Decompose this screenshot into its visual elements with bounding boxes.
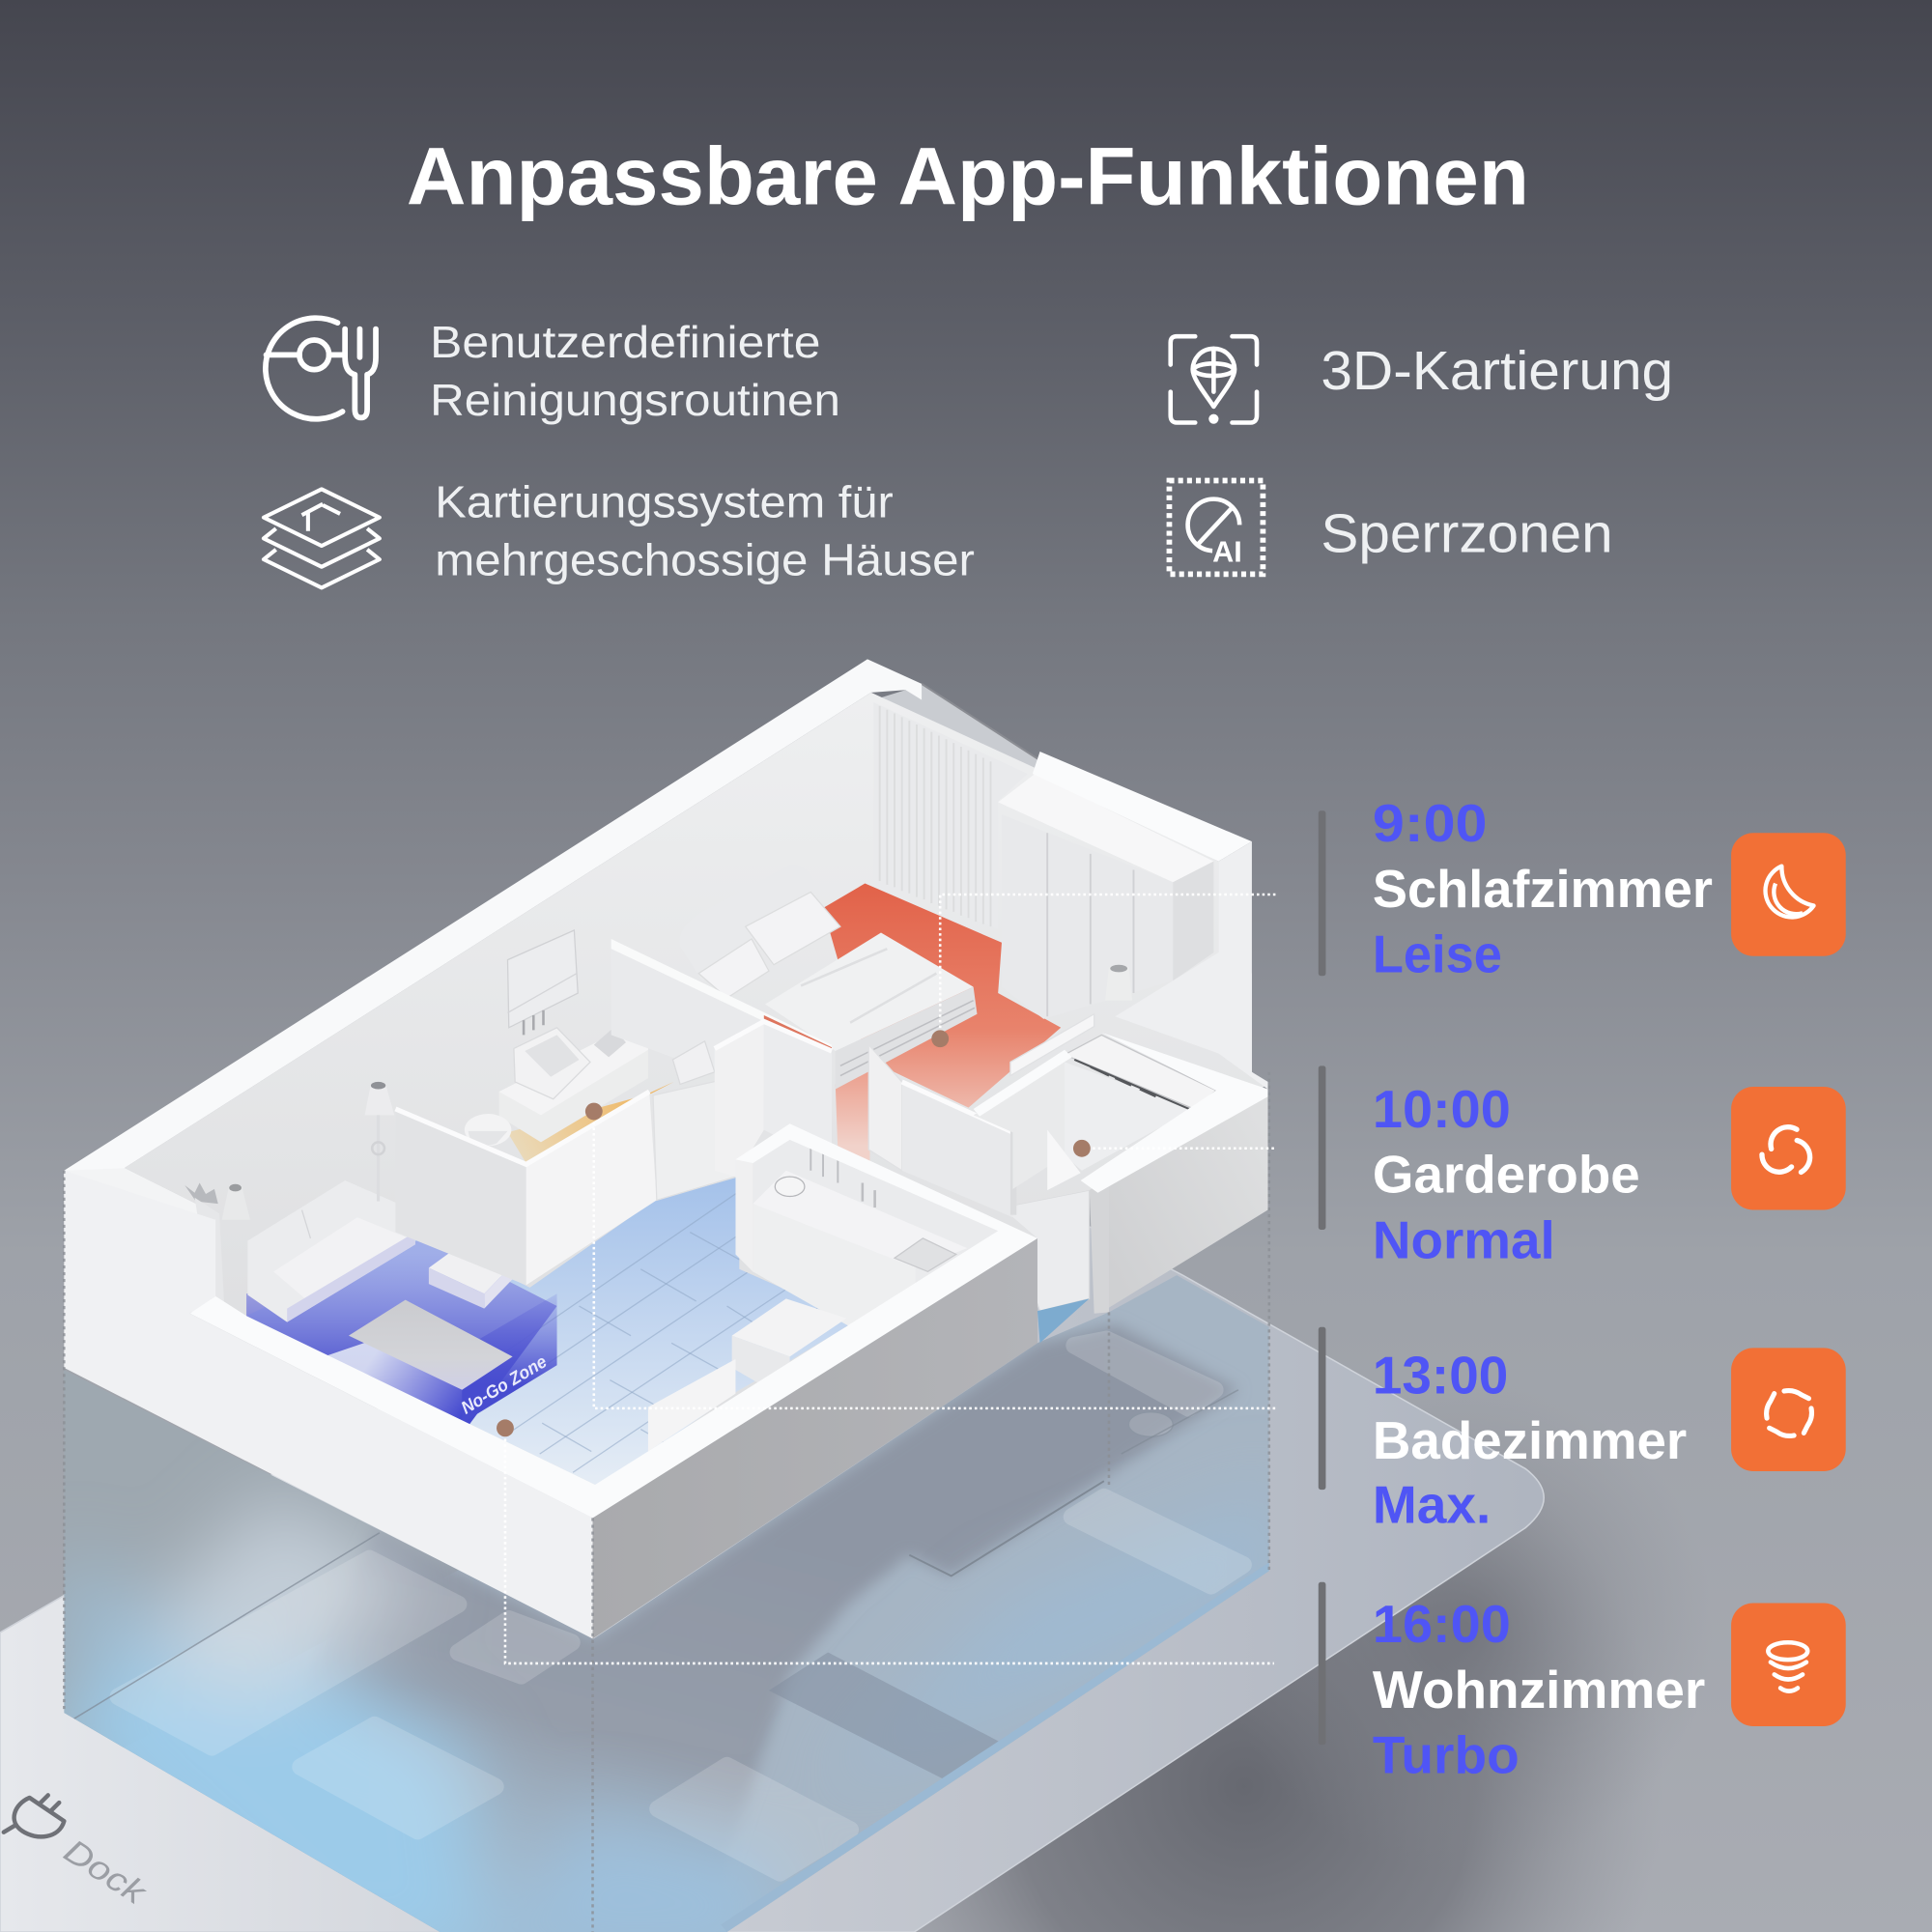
icon: robot and fork bbox=[266, 318, 376, 419]
window glass bbox=[873, 684, 1040, 774]
schedule: living room bbox=[1319, 1582, 1846, 1784]
nightstand bbox=[672, 1041, 715, 1084]
closet interior bbox=[974, 1062, 1065, 1189]
kitchen left wall bbox=[735, 1159, 753, 1271]
floor plate bbox=[0, 1109, 1544, 1932]
bed bbox=[680, 865, 977, 1090]
icon: no-go AI zone bbox=[1169, 480, 1263, 574]
chair bbox=[648, 1359, 735, 1452]
icon: normal mode bbox=[1731, 1087, 1846, 1210]
feature: no-go zones: Sperrzonen bbox=[1321, 502, 1613, 563]
wall: bathroom front bbox=[395, 1109, 526, 1285]
blue floor bbox=[254, 1178, 848, 1485]
schedule: wardrobe: Garderobe bbox=[1373, 1145, 1640, 1205]
no-go zone bbox=[246, 1238, 557, 1424]
feature: custom routines: Benutzerdefinierte bbox=[430, 317, 820, 367]
feature: multi-floor mapping: Kartierungssystem für bbox=[435, 477, 894, 527]
closet outer wall bbox=[1090, 1092, 1267, 1312]
callout dots bbox=[497, 1030, 1091, 1436]
icon: stacked layers bbox=[264, 489, 380, 587]
schedule: living room: 16:00 bbox=[1373, 1594, 1511, 1654]
schedule: wardrobe bbox=[1319, 1065, 1846, 1269]
dresser top bbox=[1010, 1014, 1094, 1076]
mirror bbox=[508, 930, 578, 1028]
schedule: bedroom: 9:00 bbox=[1373, 793, 1488, 853]
icon: no-go AI zone: AI bbox=[1212, 536, 1242, 569]
dining table bbox=[732, 1298, 846, 1356]
schedule: bathroom: 13:00 bbox=[1373, 1346, 1508, 1406]
icon: dock bbox=[4, 1795, 64, 1836]
feature: custom routines bbox=[430, 317, 840, 425]
plant bbox=[185, 1182, 250, 1306]
front-left face bbox=[64, 1171, 593, 1638]
feature: 3D mapping: 3D-Kartierung bbox=[1321, 340, 1673, 401]
dotted guides: volume edges bbox=[64, 1072, 1269, 1932]
map rooms bbox=[64, 1339, 1269, 1932]
interior base bbox=[125, 693, 1267, 1518]
schedule: bathroom: Max. bbox=[1373, 1475, 1491, 1535]
rear-left wall top bbox=[64, 659, 922, 1233]
vanity and sink bbox=[499, 1010, 648, 1142]
label: no-go zone: No-Go Zone bbox=[457, 1350, 550, 1418]
icon: turbo mode bbox=[1731, 1603, 1846, 1726]
sofa bbox=[247, 1180, 415, 1322]
schedule: bedroom: Schlafzimmer bbox=[1373, 859, 1713, 919]
curtain bbox=[873, 684, 1040, 929]
map volume bbox=[64, 1275, 1269, 1932]
feature: multi-floor mapping: mehrgeschossige Häuser bbox=[435, 535, 975, 585]
coffee table bbox=[349, 1300, 513, 1390]
kitchen bbox=[648, 1140, 998, 1452]
schedule: bathroom bbox=[1319, 1327, 1846, 1535]
schedule: wardrobe: 10:00 bbox=[1373, 1079, 1511, 1139]
title: Anpassbare App-Funktionen bbox=[407, 131, 1529, 222]
isometric apartment bbox=[64, 659, 1267, 1638]
bedroom floor bbox=[823, 884, 1061, 1164]
interior walls bbox=[395, 939, 1267, 1285]
schedule: bedroom: Leise bbox=[1373, 923, 1502, 983]
floor shadow bbox=[764, 1380, 1932, 1932]
right rear wall bbox=[1033, 752, 1252, 862]
closet top ribbon bbox=[1081, 1033, 1267, 1193]
schedule: bedroom bbox=[1319, 793, 1846, 983]
schedule: bathroom: Badezimmer bbox=[1373, 1410, 1687, 1470]
toilet bbox=[465, 1114, 511, 1146]
ottoman bbox=[429, 1238, 518, 1309]
icon: max mode bbox=[1731, 1348, 1846, 1471]
icon: quiet mode bbox=[1731, 833, 1846, 956]
right-front face bbox=[593, 1238, 1037, 1638]
bedroom door and wall bbox=[868, 1045, 902, 1171]
pot bbox=[775, 1177, 805, 1197]
wall column bbox=[715, 1021, 764, 1177]
closet door bbox=[1002, 1190, 1090, 1311]
bath floor bbox=[508, 1082, 674, 1163]
feature: custom routines: Reinigungsroutinen bbox=[430, 375, 840, 425]
feature: multi-floor mapping bbox=[435, 477, 975, 585]
stub wall bbox=[64, 1168, 215, 1312]
wall: bath and bed partition bbox=[611, 944, 832, 1115]
schedule: wardrobe: Normal bbox=[1373, 1209, 1555, 1269]
dotted callout lines bbox=[505, 895, 1276, 1663]
schedule: living room: Wohnzimmer bbox=[1373, 1660, 1705, 1719]
schedule: living room: Turbo bbox=[1373, 1724, 1520, 1784]
wardrobe bbox=[998, 774, 1213, 1019]
top wall ribbon bbox=[189, 1123, 1037, 1518]
blue floor behind door bbox=[1037, 1298, 1090, 1343]
label: Dock: Dock bbox=[57, 1833, 154, 1913]
floor lamps and plant bbox=[365, 1082, 394, 1202]
bathroom door bbox=[653, 1077, 735, 1200]
icon: 3D mapping pin bbox=[1171, 336, 1257, 424]
